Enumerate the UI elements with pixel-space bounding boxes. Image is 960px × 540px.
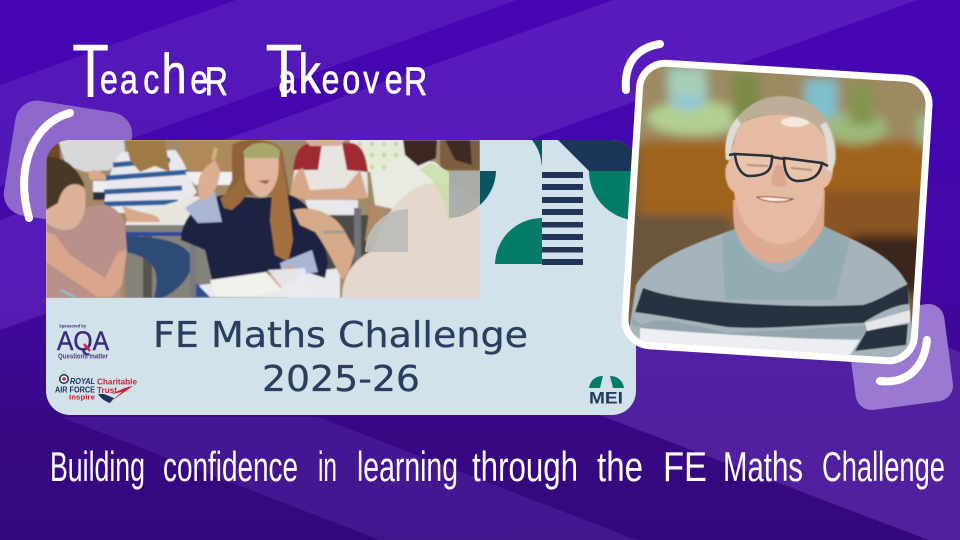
logo: Royal Air Force Charitable Trust Inspire: [55, 374, 138, 403]
title: h: [162, 42, 187, 105]
glasses: [729, 154, 828, 181]
portrait photo: [628, 66, 926, 358]
center girl desk: [196, 268, 340, 298]
title: R: [404, 59, 427, 104]
card title: [153, 315, 528, 400]
hair: [725, 96, 836, 172]
title: eac: [100, 57, 159, 102]
subtitle: through: [472, 443, 578, 490]
subtitle: confidence: [163, 443, 298, 490]
subtitle: FE: [663, 443, 707, 490]
logo: Royal Air Force Charitable Trust Inspire: ROYAL: [70, 377, 95, 386]
logo: AQA: Sponsored by: [59, 324, 86, 328]
neck: [733, 190, 825, 263]
arc: left card accent: [24, 113, 70, 218]
logo: AQA: AQA: [57, 326, 109, 356]
face: [725, 114, 833, 244]
arc: portrait bottom right: [880, 340, 927, 381]
decorative square: left: [1, 97, 135, 231]
eyes and mouth: [747, 165, 812, 170]
back students: [58, 140, 125, 172]
logo: MEI: [589, 376, 624, 408]
logo: Royal Air Force Charitable Trust Inspire: Inspire: [69, 392, 95, 402]
arc: portrait top left: [626, 44, 660, 90]
logo: MEI: MEI: [589, 388, 623, 408]
translucent shapes over photo: [365, 209, 408, 252]
geometric shapes: [480, 140, 640, 265]
subtitle: Maths: [723, 443, 803, 490]
logo: Royal Air Force Charitable Trust Inspire: Charitable: [97, 378, 138, 386]
teacher: [293, 208, 355, 280]
title: e: [190, 57, 208, 102]
decorative square: right: [845, 302, 955, 412]
title: eove: [322, 57, 403, 102]
title: a: [278, 57, 297, 102]
title: R: [205, 59, 228, 104]
title: k: [298, 42, 321, 105]
card title: 2025-26: [262, 359, 420, 400]
logo: AQA: Questions matter: [58, 354, 108, 360]
card: FE Maths Challenge: [46, 139, 640, 415]
logo: Royal Air Force Charitable Trust Inspire: Trust: [97, 386, 117, 395]
center girl: [225, 139, 290, 195]
card title: FE Maths Challenge: [153, 315, 528, 356]
blurred background: [628, 66, 926, 332]
title: T: [250, 29, 303, 114]
left boy: [46, 205, 127, 297]
sweater: [626, 96, 915, 370]
subtitle: the: [597, 443, 643, 490]
title: T: [72, 29, 109, 114]
subtitle: learning: [357, 443, 458, 490]
subtitle: in: [318, 443, 337, 490]
classroom photo: [46, 139, 480, 298]
portrait frame: [623, 62, 931, 362]
subtitle: Building: [50, 443, 145, 490]
logo: Royal Air Force Charitable Trust Inspire: AIR FORCE: [55, 386, 96, 394]
